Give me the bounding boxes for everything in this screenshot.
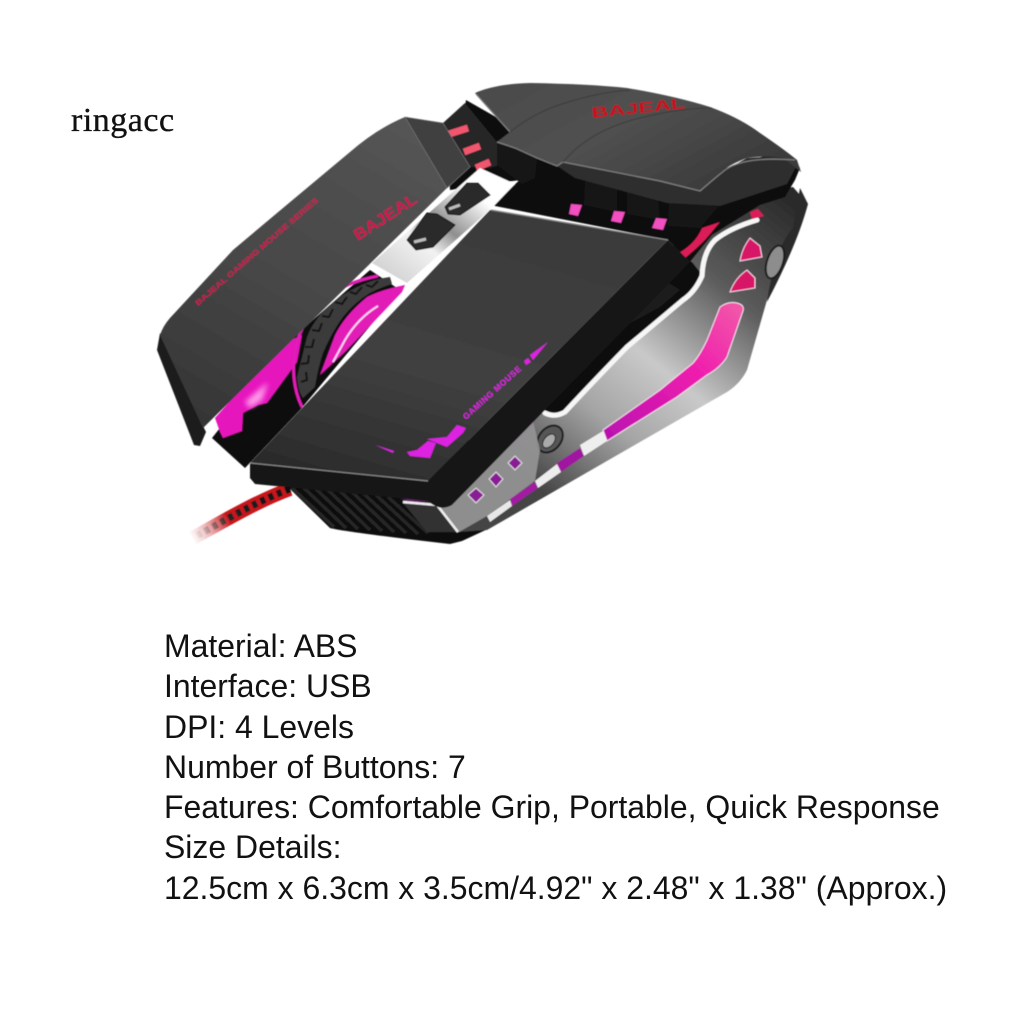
shell brand text: BAJEAL — [591, 95, 686, 122]
shell edge highlights — [476, 94, 795, 191]
pink tooth lights — [569, 204, 667, 230]
pink side light strip — [603, 302, 743, 441]
pink red inner trim — [675, 209, 764, 258]
front pink glow line — [404, 414, 533, 497]
braided cable — [193, 489, 290, 538]
buttons spec: Number of Buttons: 7 — [164, 749, 466, 785]
size heading: Size Details: — [164, 829, 342, 865]
metal button strip — [372, 168, 515, 283]
mouse product illustration — [157, 83, 808, 544]
shaft under left button — [212, 270, 400, 468]
scroll wheel — [294, 276, 405, 407]
shell front band — [557, 156, 797, 206]
DPI button one — [407, 213, 455, 250]
red-pink rear bars — [449, 128, 490, 168]
left button decorative text: BAJEAL GAMING MOUSE SERIES — [193, 196, 320, 308]
recess inner button — [548, 280, 680, 388]
DPI button two — [445, 183, 490, 215]
size values: 12.5cm x 6.3cm x 3.5cm/4.92" x 2.48" x 1.38" (Approx.) — [164, 870, 947, 906]
left button logo: BAJEAL — [351, 191, 421, 244]
left button rear facet — [405, 117, 470, 188]
material spec: Material: ABS — [164, 628, 357, 664]
left button front thickness — [157, 333, 206, 446]
right button thickness — [250, 240, 690, 508]
button highlights — [414, 205, 460, 242]
front white edge line — [403, 421, 532, 532]
features spec: Features: Comfortable Grip, Portable, Quick Response — [164, 789, 940, 825]
lower segmented light strip — [487, 431, 607, 522]
rear bar surround — [443, 103, 515, 168]
dark rear side edge — [767, 188, 808, 302]
front silver plate — [437, 421, 540, 532]
brand name: ringacc — [71, 102, 175, 139]
black under-shell cavity with teeth — [445, 100, 800, 262]
top rear shell — [475, 83, 801, 191]
tooth blocks — [497, 142, 718, 228]
front dark lower plate — [403, 503, 458, 532]
side button recess — [528, 240, 703, 414]
rear pink arrow vents — [730, 238, 762, 292]
pink gaming emblem — [375, 342, 548, 458]
black base with vents — [270, 440, 560, 544]
gaming mouse label: GAMING MOUSE — [461, 363, 524, 421]
product specification text — [164, 628, 947, 906]
silver side body — [437, 187, 807, 532]
front square vents — [468, 456, 522, 503]
interface spec: Interface: USB — [164, 668, 372, 704]
shell crease — [510, 90, 712, 162]
right button edge highlights — [250, 210, 668, 481]
DPI spec: DPI: 4 Levels — [164, 709, 354, 745]
glow highlight — [245, 382, 268, 408]
right button panel — [250, 210, 668, 481]
white side highlight — [545, 220, 757, 415]
pink underglow — [215, 335, 302, 438]
left button panel — [160, 117, 447, 428]
rear round button — [762, 243, 788, 281]
front round button — [532, 420, 568, 458]
